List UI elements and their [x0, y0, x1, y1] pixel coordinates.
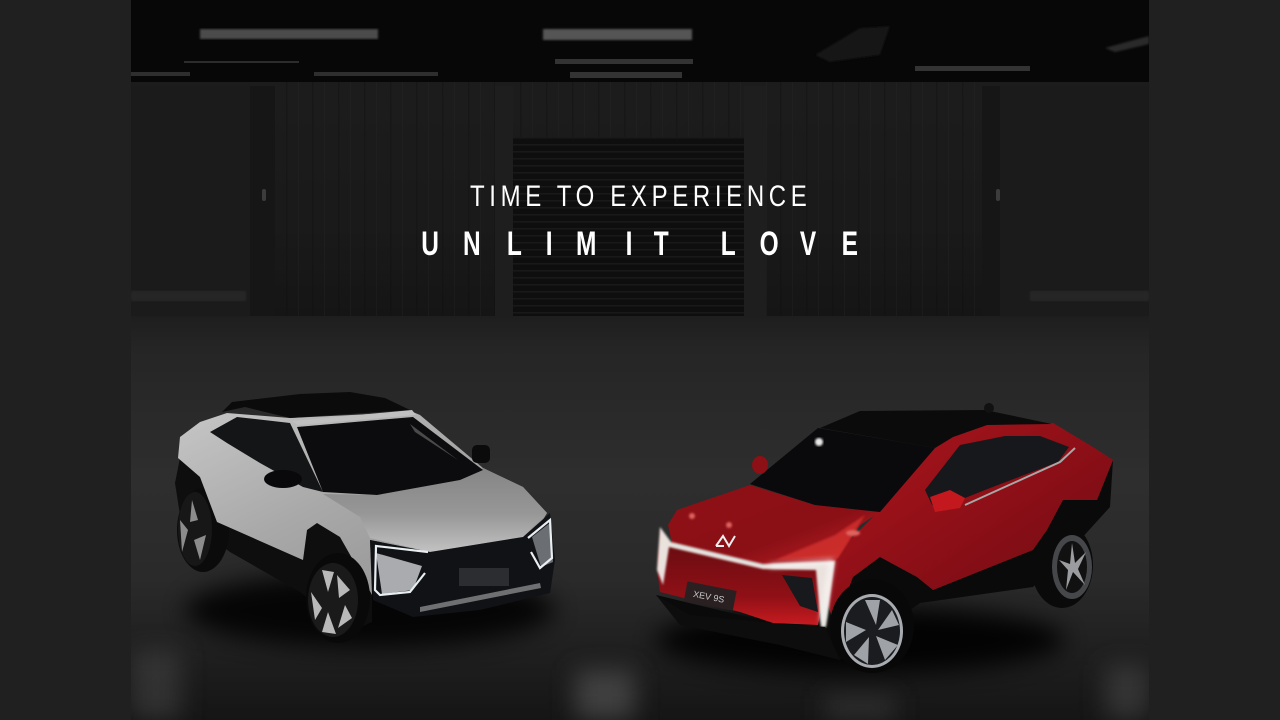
front wheel — [830, 579, 914, 673]
showroom background — [131, 0, 1149, 720]
black panoramic roof — [222, 392, 410, 418]
windscreen light — [815, 438, 823, 446]
hood — [668, 485, 880, 565]
hood speculars — [689, 513, 860, 536]
hood highlight — [775, 515, 865, 560]
dark lower body and arches — [656, 460, 1113, 660]
wing mirrors — [752, 456, 965, 512]
number plate — [459, 568, 509, 586]
red electric SUV — [655, 403, 1113, 674]
heading: time to experience: TIME TO EXPERIENCE — [470, 178, 807, 213]
rear wheel — [177, 488, 229, 572]
headlamp cluster — [782, 575, 818, 612]
windscreen — [297, 417, 483, 495]
front fascia — [370, 513, 555, 617]
front wheel — [306, 553, 370, 643]
side windows — [210, 417, 323, 492]
wing mirrors — [264, 445, 490, 488]
LED light strips — [375, 520, 552, 595]
lower bumper — [656, 595, 840, 660]
red body side — [815, 423, 1113, 625]
chrome window trim — [965, 448, 1075, 505]
LED glow — [770, 561, 832, 622]
windscreen reflection — [410, 424, 458, 460]
windscreen — [750, 428, 935, 512]
hood — [323, 468, 547, 552]
side windows — [925, 436, 1069, 505]
shadow under silver SUV — [185, 572, 555, 648]
right side band — [1149, 0, 1280, 720]
silver electric SUV — [175, 392, 555, 648]
title text — [421, 178, 858, 263]
shark fin antenna — [984, 403, 994, 413]
shadow under red SUV — [655, 606, 1065, 674]
brand logo — [716, 536, 735, 546]
front fascia — [657, 530, 830, 625]
left side band — [0, 0, 131, 720]
roller door — [513, 138, 744, 296]
dark lower body and wheel arches — [175, 458, 372, 632]
heading: unlimit love: UNLIMITLOVE — [421, 225, 858, 263]
headlamp glass — [376, 553, 422, 594]
roof highlight — [292, 410, 416, 425]
back wall — [250, 82, 1000, 316]
black panoramic roof — [820, 410, 1052, 448]
floor — [131, 316, 1149, 720]
number plate — [684, 581, 737, 611]
lower bumper strip — [420, 583, 541, 612]
infographic canvas — [131, 0, 1149, 720]
number plate: XEV 9S — [692, 589, 725, 605]
rear wheel — [1031, 522, 1093, 608]
LED light bar — [657, 527, 835, 627]
right headlamp glass — [532, 522, 553, 567]
silver body — [178, 412, 547, 595]
ceiling — [131, 0, 1149, 86]
